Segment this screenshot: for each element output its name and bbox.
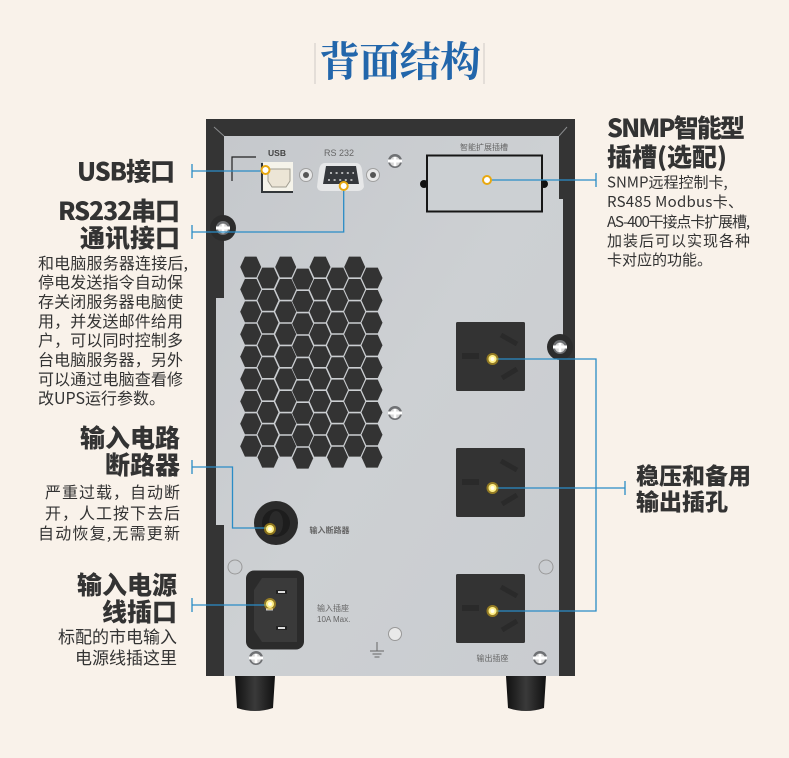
text: power inlet description: 电源线插这里 <box>75 644 177 669</box>
text: RS232 description: 台电脑服务器，另外 <box>38 346 183 370</box>
text: SNMP description: 加装后可以实现各种 <box>607 230 750 251</box>
text: RS232 description: 改UPS运行参数。 <box>38 385 165 409</box>
label: power inlet: 输入电源 <box>77 566 177 602</box>
RS232 port: RS 232 <box>324 148 354 158</box>
power inlet <box>246 570 350 650</box>
power inlet: 输入插座 <box>317 603 349 614</box>
text: power inlet description <box>58 623 177 669</box>
text: RS232 description <box>38 250 188 409</box>
text: breaker description: 自动恢复,无需更新 <box>38 520 180 544</box>
expansion slot <box>420 142 548 212</box>
input breaker <box>254 501 350 545</box>
text: RS232 description: 用，并发送邮件给用 <box>38 308 183 332</box>
label: input breaker: 输入电路 <box>80 419 180 455</box>
label: RS232 port: RS232串口 <box>58 192 180 228</box>
label: USB port: USB接口 <box>77 152 175 188</box>
text: RS232 description: 户，可以同时控制多 <box>38 327 183 351</box>
output sockets: 输出插座 <box>476 653 508 664</box>
label: SNMP slot: 插槽(选配) <box>607 138 727 174</box>
rear panel <box>214 127 567 676</box>
label: output sockets <box>636 457 751 517</box>
title: 背面结构 <box>319 29 481 88</box>
ground symbol <box>370 642 384 657</box>
label: RS232 port <box>58 192 180 255</box>
text: SNMP description: AS-400干接点卡扩展槽, <box>607 211 750 232</box>
text: SNMP description: RS485 Modbus卡、 <box>607 191 743 212</box>
connector dots <box>262 166 498 617</box>
label: output sockets: 稳压和备用 <box>636 457 751 491</box>
text: RS232 description: 存关闭服务器电脑使 <box>38 288 183 312</box>
label: RS232 port: 通讯接口 <box>80 219 180 255</box>
connector lines <box>192 164 625 612</box>
text: breaker description: 严重过载，自动断 <box>45 479 180 503</box>
output sockets <box>456 322 525 664</box>
USB port: USB <box>268 148 286 158</box>
label: input breaker <box>80 419 180 482</box>
text: power inlet description: 标配的市电输入 <box>58 623 177 648</box>
text: SNMP description: SNMP远程控制卡, <box>607 172 728 192</box>
text: RS232 description: 可以通过电脑查看修 <box>38 366 183 390</box>
hexagonal vent <box>240 257 382 469</box>
label: output sockets: 输出插孔 <box>636 483 728 517</box>
expansion slot: 智能扩展插槽 <box>460 142 508 153</box>
RS232 port <box>300 148 380 191</box>
input breaker: 输入断路器 <box>310 525 350 536</box>
text: SNMP description: 卡对应的功能。 <box>607 249 712 270</box>
power inlet: 10A Max. <box>317 615 350 624</box>
text: RS232 description: 和电脑服务器连接后, <box>38 250 188 274</box>
label: SNMP slot: SNMP智能型 <box>607 109 745 145</box>
label: input breaker: 断路器 <box>105 446 180 482</box>
text: RS232 description: 停电发送指令自动保 <box>38 269 183 293</box>
label: SNMP slot <box>607 109 745 174</box>
screws <box>210 154 573 665</box>
text: breaker description <box>38 479 180 544</box>
feet <box>235 676 546 711</box>
USB port <box>232 148 293 193</box>
label: power inlet <box>77 566 177 629</box>
text: breaker description: 开，人工按下去后 <box>45 500 180 524</box>
UPS rear device <box>206 119 575 711</box>
cabinet frame <box>206 119 575 676</box>
text: SNMP description <box>607 172 750 270</box>
label: power inlet: 线插口 <box>102 593 177 629</box>
